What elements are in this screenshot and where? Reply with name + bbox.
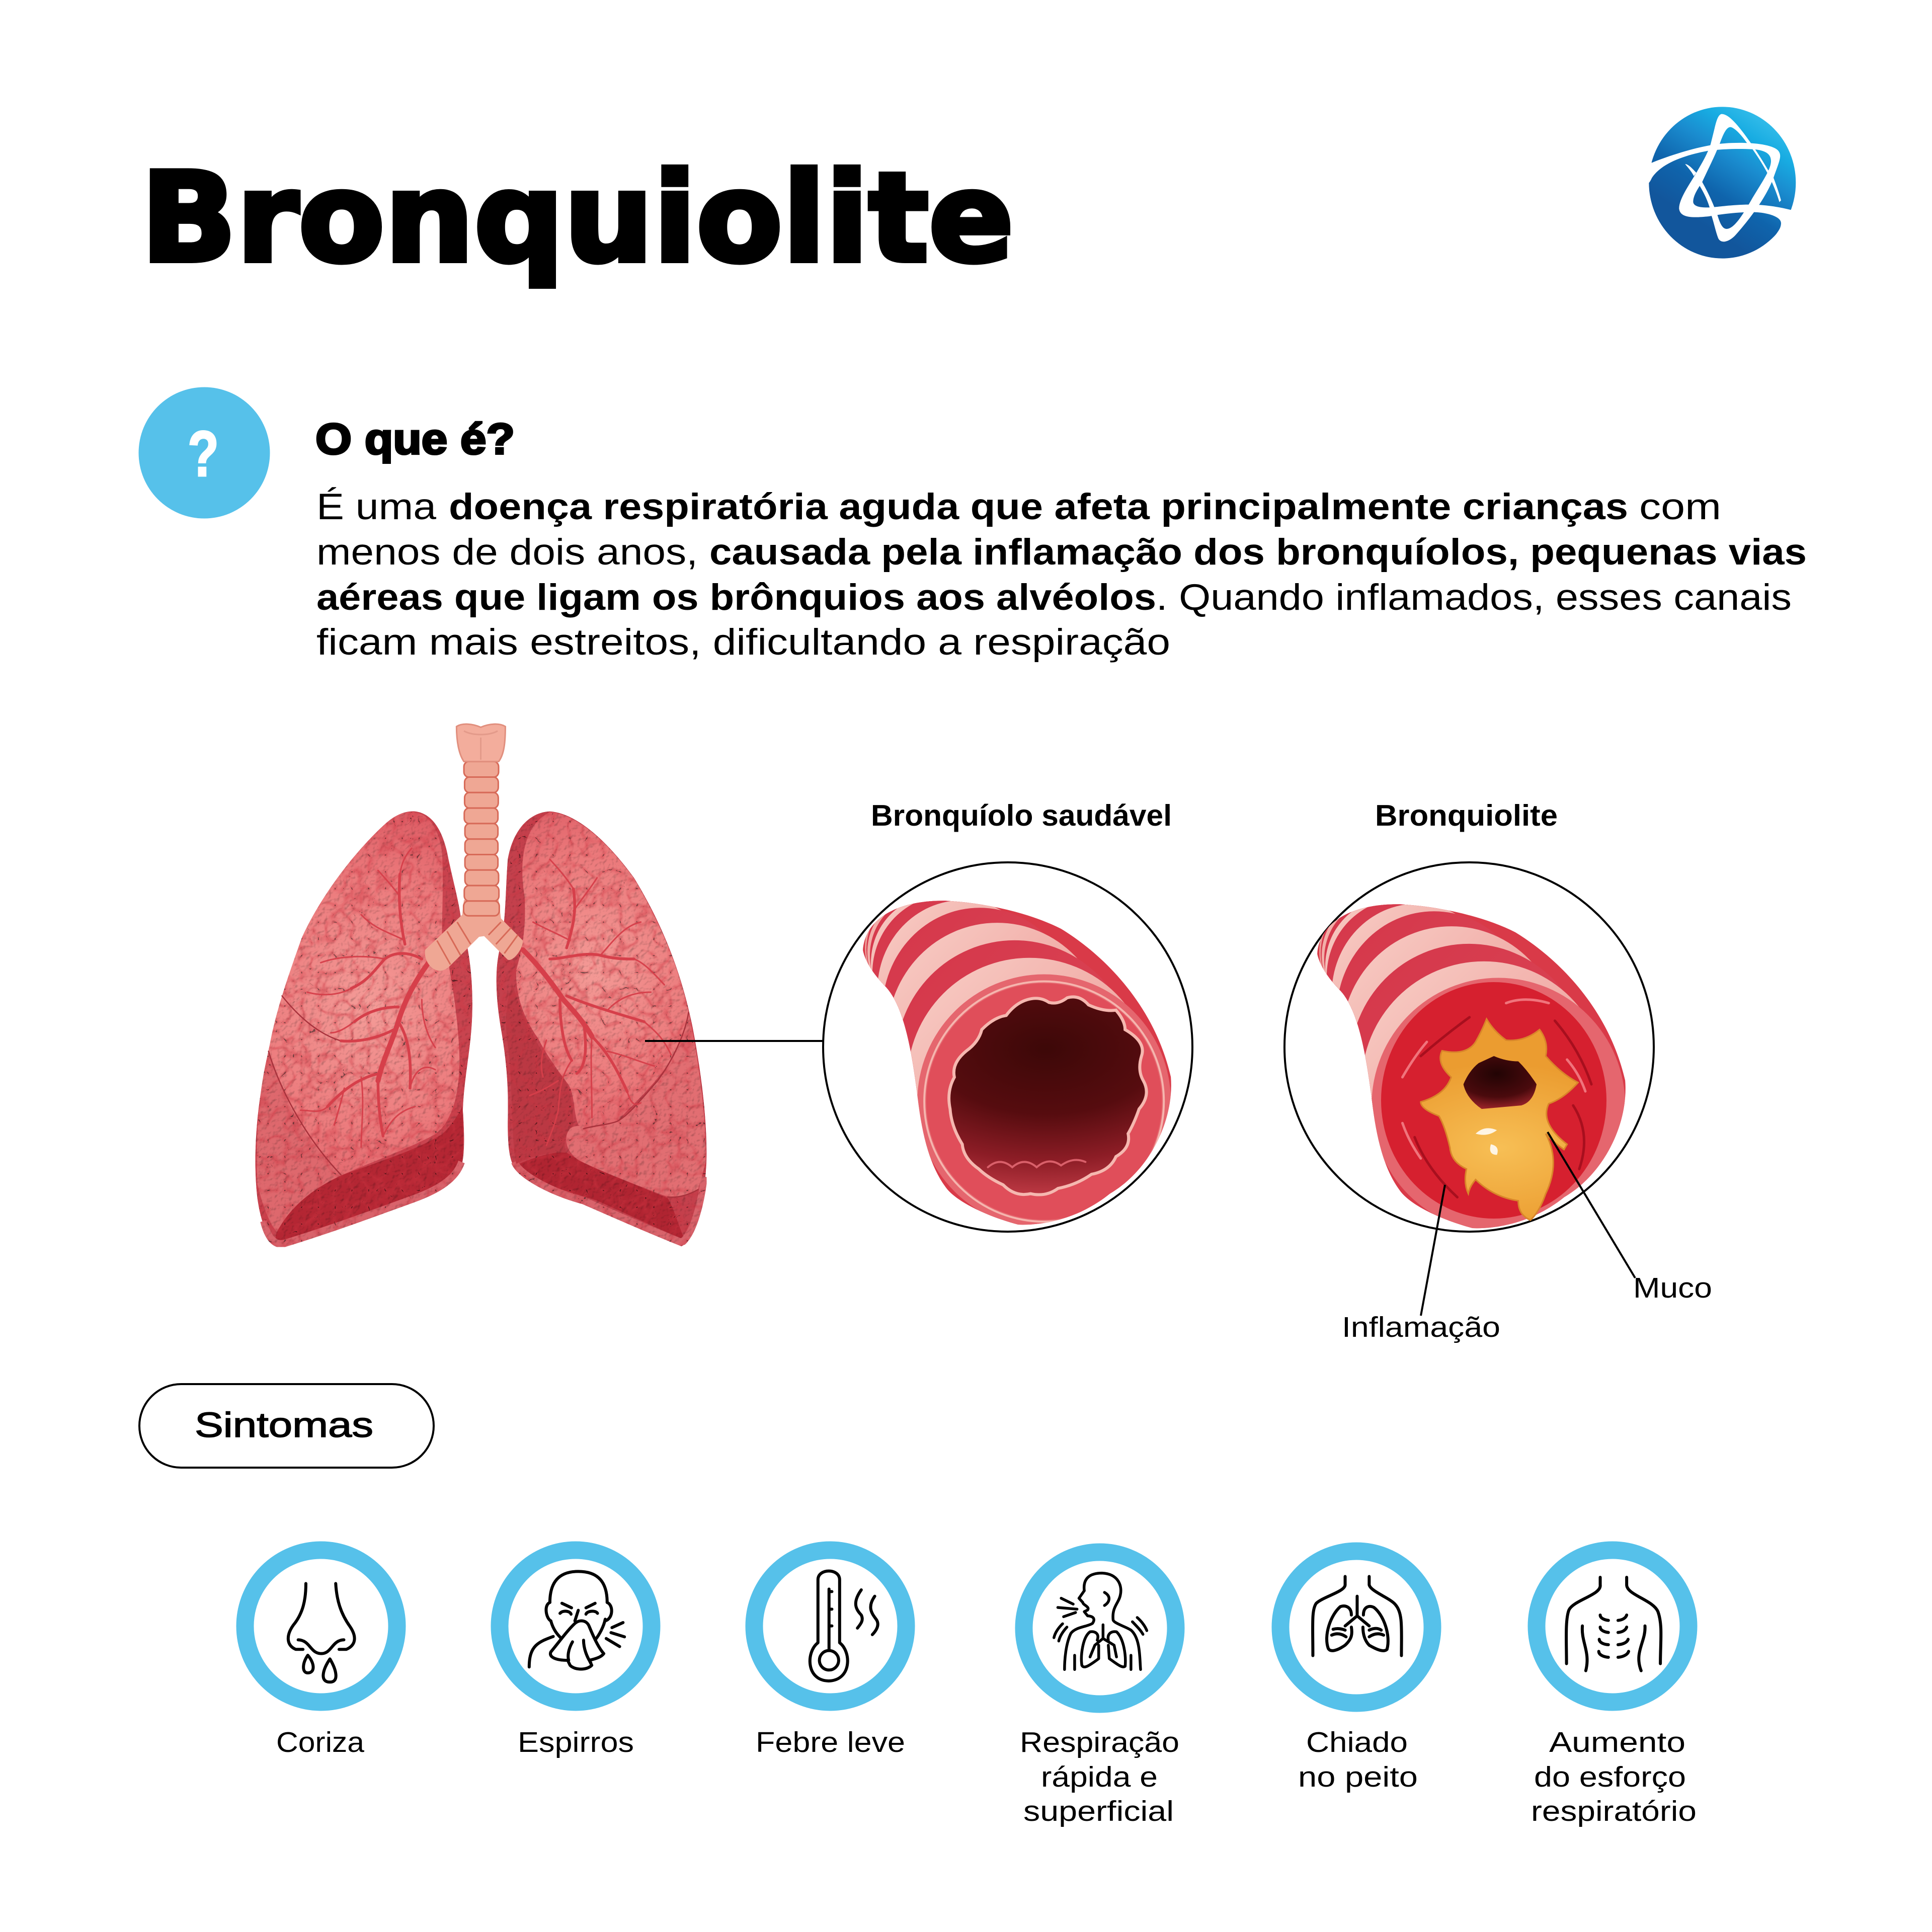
callout: Muco: [1548, 1132, 1712, 1304]
icon: ring: [1280, 1551, 1432, 1703]
icon: chest lungs: [1313, 1576, 1402, 1656]
label: Coriza: [276, 1726, 364, 1758]
label: respiratório: [1531, 1795, 1697, 1827]
symptom: Respiração rápida e superficial: [1020, 1552, 1179, 1827]
label: [1020, 1726, 1179, 1827]
icon: ring: [245, 1550, 397, 1702]
icon: logo star of David globe: [1645, 107, 1801, 259]
symptom: Espirros: [500, 1550, 652, 1758]
tube body rings: [863, 901, 1171, 1225]
label: Febre leve: [756, 1726, 905, 1758]
heading: Bronquiolite: Bronquiolite: [1375, 799, 1558, 832]
heading pill: Sintomas: [139, 1384, 434, 1468]
heading pill: Sintomas: Sintomas: [195, 1405, 373, 1444]
label: Respiração: [1020, 1726, 1179, 1758]
symptom: Febre leve: [754, 1550, 906, 1758]
label: do esforço: [1534, 1761, 1686, 1793]
circle outline: [1284, 862, 1654, 1232]
text block: definition: ficam mais estreitos, dificultando a respiração: [316, 622, 1170, 663]
label: rápida e: [1041, 1761, 1158, 1793]
icon: ring: [1537, 1550, 1688, 1702]
trachea and bronchi: [425, 724, 523, 971]
text block: definition: É uma: [316, 487, 436, 527]
text block: definition: doença respiratória aguda que afeta principalmente crianças: [449, 487, 1628, 527]
symptom: Aumento do esforço respiratório: [1531, 1550, 1697, 1827]
label: Chiado: [1306, 1726, 1408, 1758]
panel: bronchiolitis: [1284, 799, 1712, 1343]
text block: definition: com: [1639, 487, 1721, 527]
icon: ring: [1024, 1552, 1176, 1704]
icon: ring: [754, 1550, 906, 1702]
text block: definition: [316, 487, 1807, 663]
icon: question mark circle: ?: [188, 418, 219, 490]
circle outline: [823, 862, 1192, 1232]
text block: definition: causada pela inflamação dos bronquíolos, pequenas vias: [709, 532, 1807, 573]
panel: O que é: [139, 387, 1807, 663]
label: Espirros: [518, 1726, 634, 1758]
text block: definition: menos de dois anos,: [316, 532, 698, 573]
panel: healthy bronchiole: [823, 799, 1192, 1241]
tube lumen: [949, 997, 1147, 1195]
label: no peito: [1298, 1761, 1418, 1793]
symptom: Coriza: [245, 1550, 397, 1758]
heading: Bronquíolo saudável: Bronquíolo saudável: [871, 799, 1172, 832]
symptom: Chiado no peito: [1280, 1551, 1432, 1793]
text block: definition: aéreas que ligam os brônquios aos alvéolos: [316, 577, 1156, 618]
callout: Muco: Muco: [1633, 1272, 1712, 1304]
title: Bronquiolite: [141, 146, 1014, 290]
label: superficial: [1023, 1795, 1174, 1827]
icon: ring: [500, 1550, 652, 1702]
label: [1531, 1726, 1697, 1827]
callout: Inflamação: [1342, 1185, 1500, 1343]
lung tissue: [255, 812, 706, 1247]
panel: symptoms: [245, 1550, 1697, 1827]
icon: torso ribs: [1566, 1577, 1661, 1671]
icon: person breathing: [1054, 1573, 1147, 1669]
illustration: lungs: [255, 724, 706, 1247]
icon: thermometer: [810, 1571, 878, 1681]
text block: definition: . Quando inflamados, esses canais: [1156, 577, 1792, 618]
icon: runny nose: [288, 1583, 355, 1682]
connector line: lung to healthy bronchiole: [645, 1040, 824, 1042]
icon: question mark circle: [139, 387, 270, 518]
label: Aumento: [1549, 1726, 1685, 1758]
heading: O que é?: O que é?: [315, 415, 515, 463]
inflamed tube body: [1317, 904, 1626, 1229]
lung vessels and fissures: [269, 848, 698, 1197]
icon: sneezing person: [529, 1571, 624, 1669]
mucus and lumen: [1402, 1000, 1591, 1220]
label: [1298, 1726, 1418, 1793]
inflamed wall: [1381, 982, 1606, 1219]
callout: Inflamação: Inflamação: [1342, 1311, 1500, 1343]
